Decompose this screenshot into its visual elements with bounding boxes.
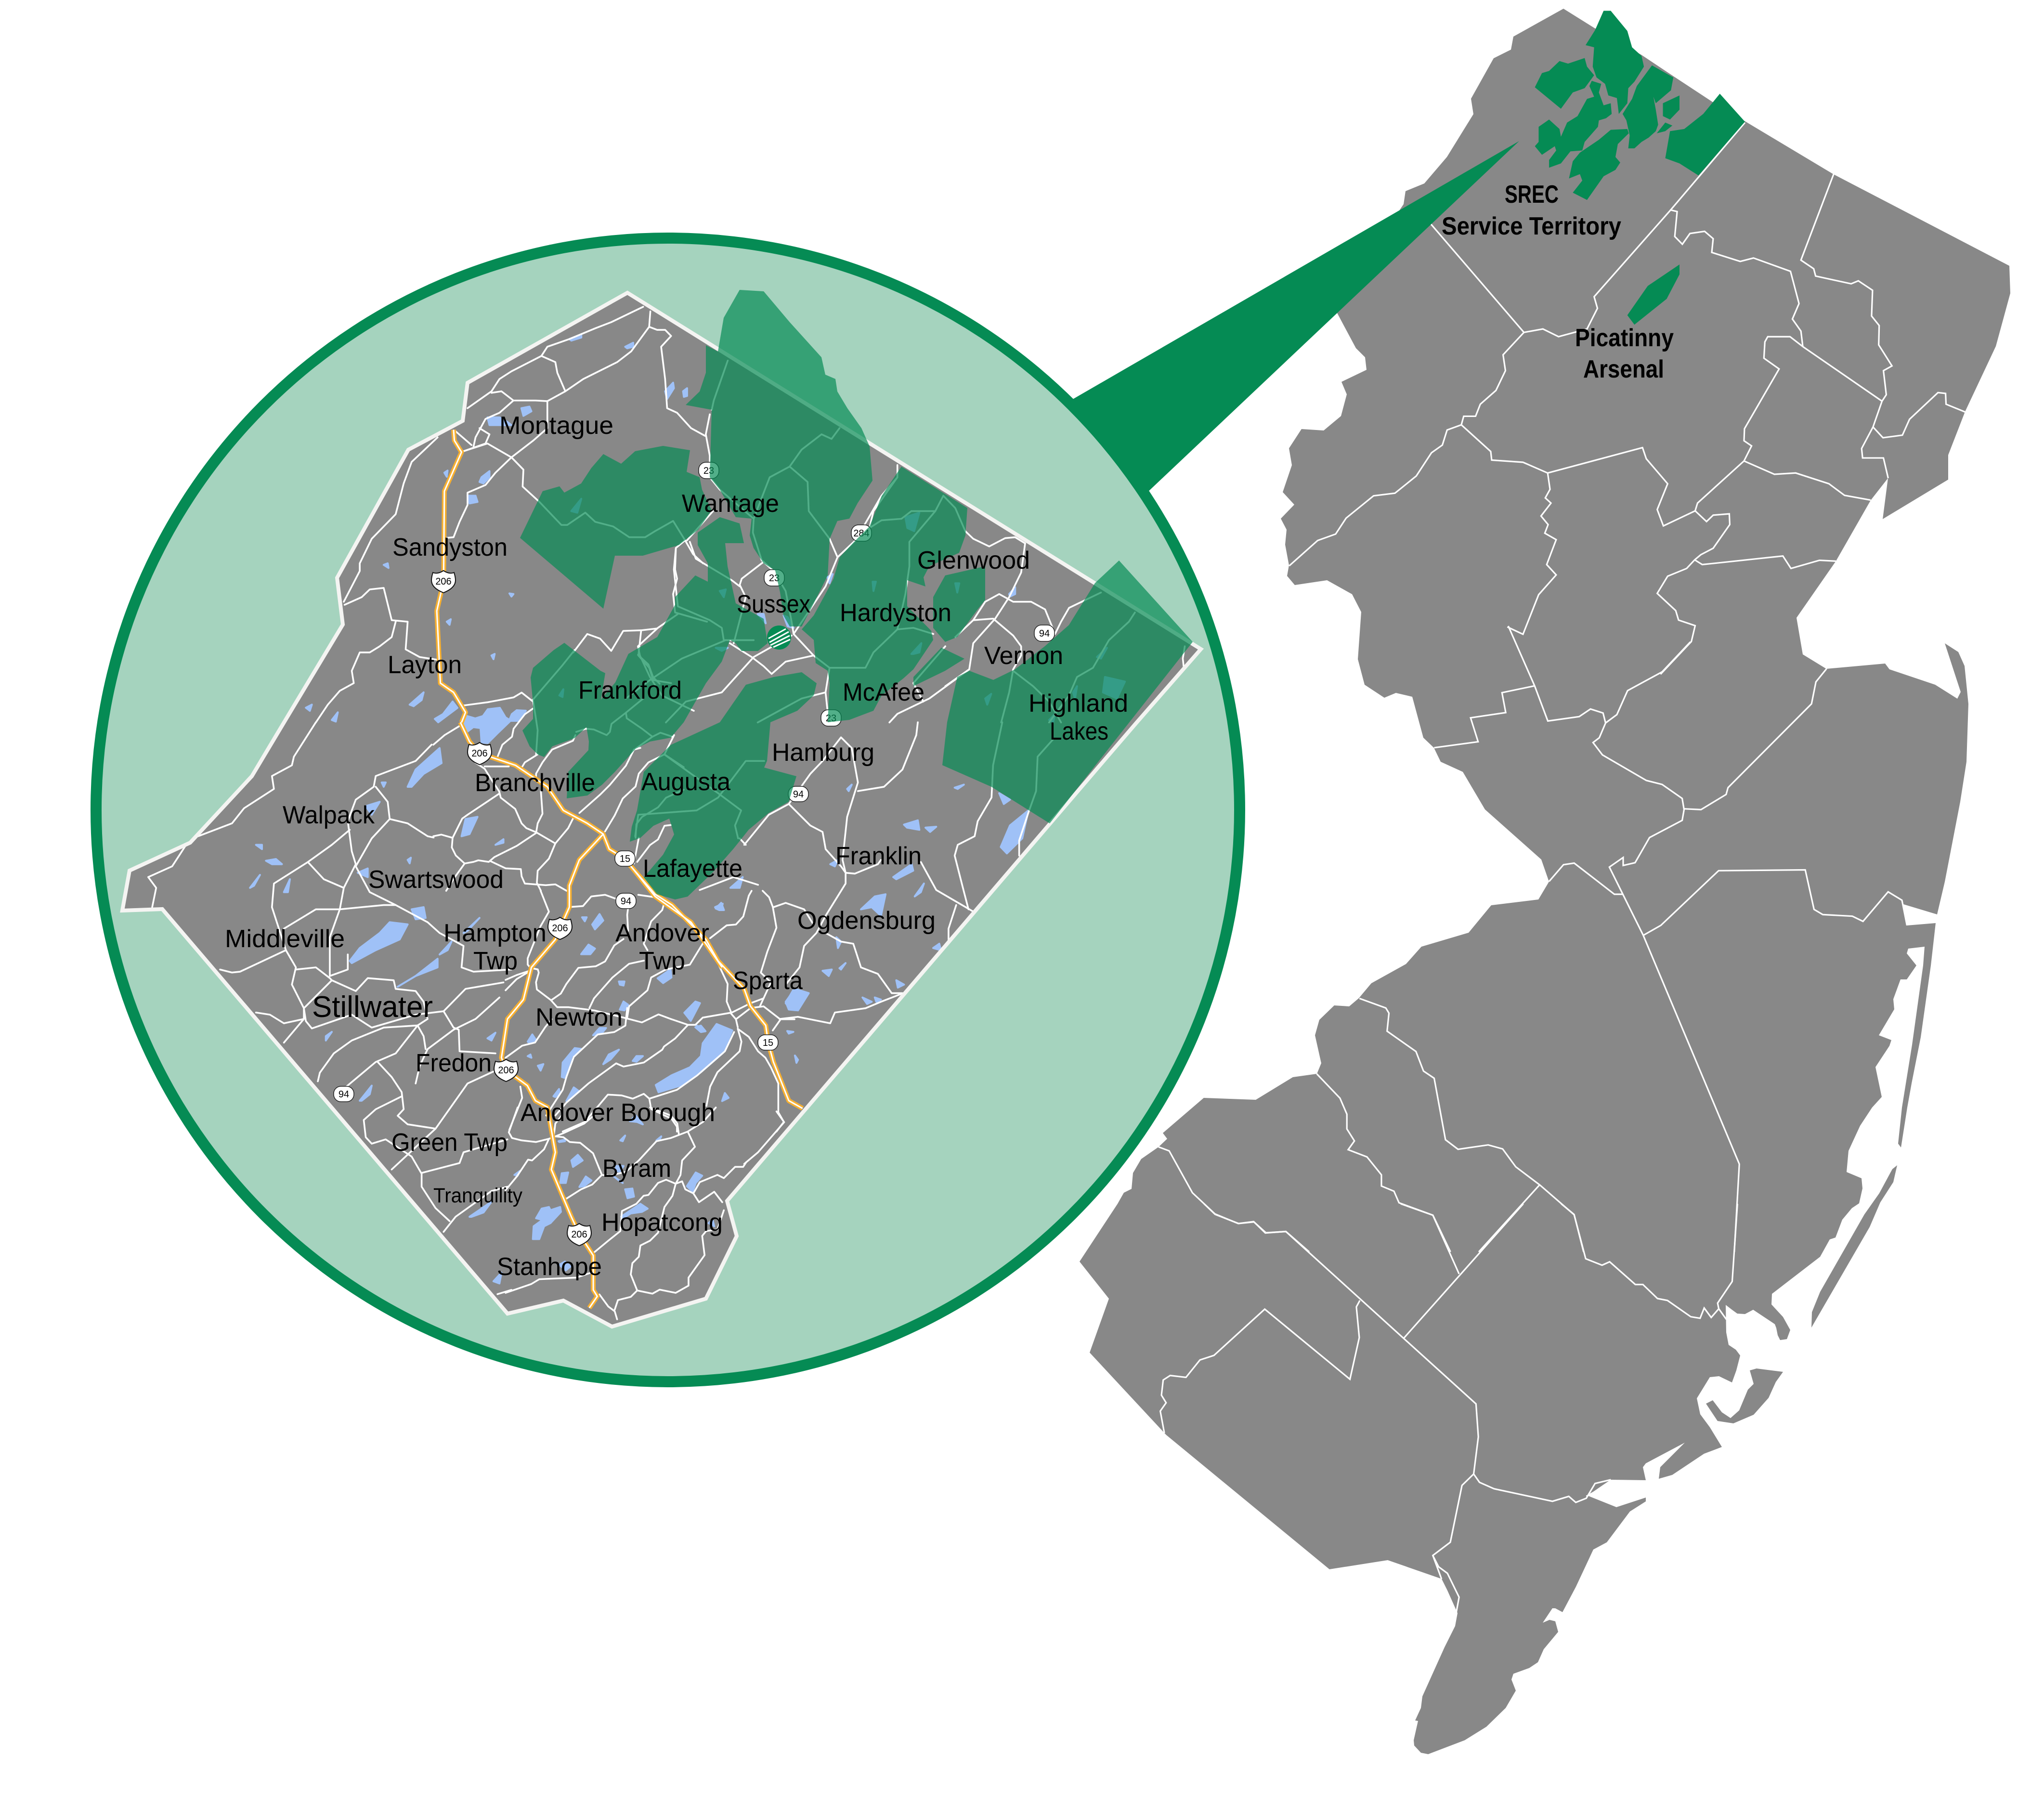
US 206 shield Fredon: 206 [498, 1065, 514, 1076]
lakes [250, 335, 1125, 1283]
shield: 23 Sussex: 23 [769, 573, 780, 584]
highway shields below overlay [699, 462, 1055, 802]
label: SREC Service Territory: Service Territory [1442, 212, 1621, 240]
label: Andover Borough: Andover Borough [521, 1099, 715, 1127]
US 206 shield Sandyston: 206 [435, 576, 452, 587]
shield: 284 [851, 525, 872, 541]
label: Middleville: Middleville [225, 925, 345, 953]
label: Vernon: Vernon [984, 642, 1063, 670]
shield: 94 Hamburg [788, 786, 808, 802]
municipality labels [225, 412, 1128, 1281]
label: Lafayette: Lafayette [643, 855, 742, 883]
label: Walpack: Walpack [283, 801, 375, 829]
label: Andover Twp: Andover [615, 919, 709, 947]
label: Augusta: Augusta [641, 768, 730, 796]
territory: Glenwood east [933, 566, 985, 642]
roads: Branchville area [433, 650, 684, 891]
shields above overlay [334, 571, 778, 1246]
label: Stanhope: Stanhope [497, 1253, 602, 1281]
New Jersey state map [1080, 9, 2010, 1754]
US 206 shield Branchville [468, 743, 492, 765]
highways 206 and 15, white centre line [437, 430, 803, 1308]
route 94 shield Stillwater: 94 [338, 1089, 349, 1100]
route 15 shield Sparta [758, 1035, 778, 1050]
territory: Hardyston and Glenwood [802, 467, 967, 722]
label: McAfee: McAfee [843, 678, 924, 706]
route 15 shield Sparta: 15 [763, 1038, 773, 1048]
label: Layton: Layton [388, 651, 462, 679]
label: Hamburg: Hamburg [772, 739, 874, 767]
label: SREC Service Territory [1442, 181, 1621, 240]
inset map: Sussex County [122, 290, 1201, 1327]
route 15 shield Lafayette [615, 851, 635, 866]
icon: SREC logo [767, 625, 791, 650]
shield: 23 north [699, 462, 719, 479]
label: Sandyston: Sandyston [392, 534, 508, 561]
highways 206 and 15, orange casing [437, 430, 803, 1308]
territory: Frankford [522, 517, 768, 798]
state landmass [1080, 9, 2010, 1754]
US 206 shield Stanhope: 206 [571, 1229, 587, 1240]
route 94 shield Lafayette: 94 [621, 896, 631, 907]
label: Tranquility: Tranquility [433, 1184, 522, 1207]
shield: 23 Hamburg [821, 710, 841, 726]
label: Andover Twp [615, 919, 709, 975]
territory: north Wantage and Sussex [686, 290, 872, 626]
shield: 23 Sussex [764, 570, 784, 586]
label: Hopatcong: Hopatcong [601, 1209, 723, 1237]
SREC territory on state map [1535, 11, 1745, 200]
route 94 shield Stillwater [334, 1086, 354, 1102]
label: Highland Lakes: Highland [1029, 690, 1128, 717]
label: Sparta: Sparta [733, 967, 803, 995]
shield: 23 Hamburg: 23 [826, 713, 836, 724]
SREC territory overlay [520, 290, 1193, 899]
label: Hampton Twp: Twp [473, 947, 518, 975]
county shape [122, 293, 1201, 1327]
label: Picatinny Arsenal: Picatinny [1575, 324, 1674, 352]
label: Franklin: Franklin [835, 842, 922, 870]
label: Ogdensburg: Ogdensburg [797, 907, 936, 935]
local roads [148, 307, 1185, 1319]
US 206 shield Stanhope [567, 1224, 591, 1246]
county outline [122, 293, 1201, 1327]
label: Highland Lakes: Lakes [1050, 717, 1108, 745]
roads: Byram and Hopatcong area [506, 1107, 746, 1319]
label: Frankford: Frankford [578, 677, 682, 704]
US 206 shield Fredon [494, 1059, 518, 1081]
label: Montague: Montague [499, 412, 613, 440]
label: SREC Service Territory: SREC [1505, 181, 1559, 208]
US 206 shield Hampton: 206 [552, 923, 568, 934]
label: Stillwater: Stillwater [312, 990, 433, 1024]
territory: Wantage west [520, 446, 712, 609]
shield: 284: 284 [853, 528, 870, 539]
roads: Newton and Andover area [506, 891, 794, 1132]
label: Hardyston: Hardyston [840, 599, 951, 627]
territory: Highland Lakes [942, 560, 1193, 823]
label: Branchville: Branchville [475, 769, 595, 797]
route 94 shield Lafayette [616, 893, 636, 909]
route 15 shield Lafayette: 15 [620, 854, 630, 864]
label: Andover Twp: Twp [639, 947, 685, 975]
label: Hampton Twp [443, 919, 547, 975]
label: Highland Lakes [1029, 690, 1128, 745]
shield: 94 Vernon [1034, 625, 1055, 641]
shield: 23 north: 23 [703, 466, 714, 476]
label: Sussex: Sussex [737, 590, 810, 618]
label: Picatinny Arsenal: Arsenal [1583, 355, 1664, 383]
label: Glenwood: Glenwood [917, 547, 1030, 574]
shield: 94 Hamburg: 94 [793, 789, 804, 800]
US 206 shield Branchville: 206 [471, 748, 488, 759]
county boundaries [1159, 123, 1965, 1613]
US 206 shield Hampton [548, 917, 572, 939]
shield: 94 Vernon: 94 [1039, 628, 1050, 639]
label: Fredon: Fredon [416, 1049, 492, 1077]
callout wedge from state map to inset [1011, 141, 1519, 553]
label: Swartswood: Swartswood [368, 866, 504, 894]
label: Green Twp: Green Twp [391, 1129, 508, 1157]
label: Newton: Newton [535, 1003, 623, 1031]
Picatinny Arsenal area [1627, 264, 1679, 325]
label: Picatinny Arsenal [1575, 324, 1674, 383]
territory: Augusta [630, 672, 817, 899]
territory: McAfee strip [913, 648, 964, 686]
label: Byram: Byram [602, 1155, 671, 1183]
Culver Lake [464, 708, 526, 743]
label: Wantage: Wantage [682, 490, 779, 518]
US 206 shield Sandyston [431, 571, 456, 593]
label: Hampton Twp: Hampton [443, 919, 547, 947]
inset circle background [96, 238, 1239, 1382]
